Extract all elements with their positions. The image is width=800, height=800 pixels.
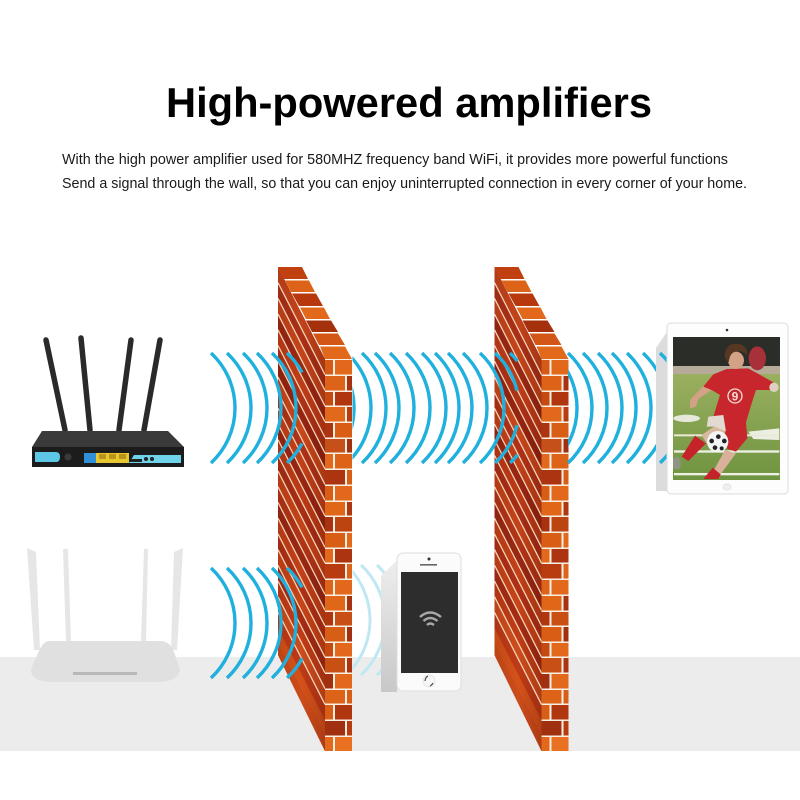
description text [62,152,747,192]
icon: tablet with football photo [667,323,788,494]
icon: phone side shadow [381,560,397,692]
description text: Send a signal through the wall, so that you can enjoy uninterrupted connection in every corner of your home. [62,176,747,192]
icon: black high-power router [32,338,184,467]
wifi waves: between the walls [352,352,519,464]
icon: white standard router [27,548,183,682]
icon: tablet with football photo: 9 [732,389,739,403]
weak faded waves toward phone [352,564,386,676]
icon: tablet side shadow [656,332,667,491]
wifi waves: tablet edge ends [660,353,684,463]
wifi waves: bottom router through wall 1 [211,568,311,678]
floor band [0,657,800,751]
description text: With the high power amplifier used for 580MHZ frequency band WiFi, it provides more powerful functions [62,152,728,168]
brick wall 1 [278,267,352,752]
wifi waves: wall 2 to tablet [566,352,656,464]
brick wall 2 [494,267,568,752]
icon: smartphone with weak wifi [397,553,461,691]
wifi waves: top router through wall 1 [211,353,311,463]
title: High-powered amplifiers [166,79,652,126]
